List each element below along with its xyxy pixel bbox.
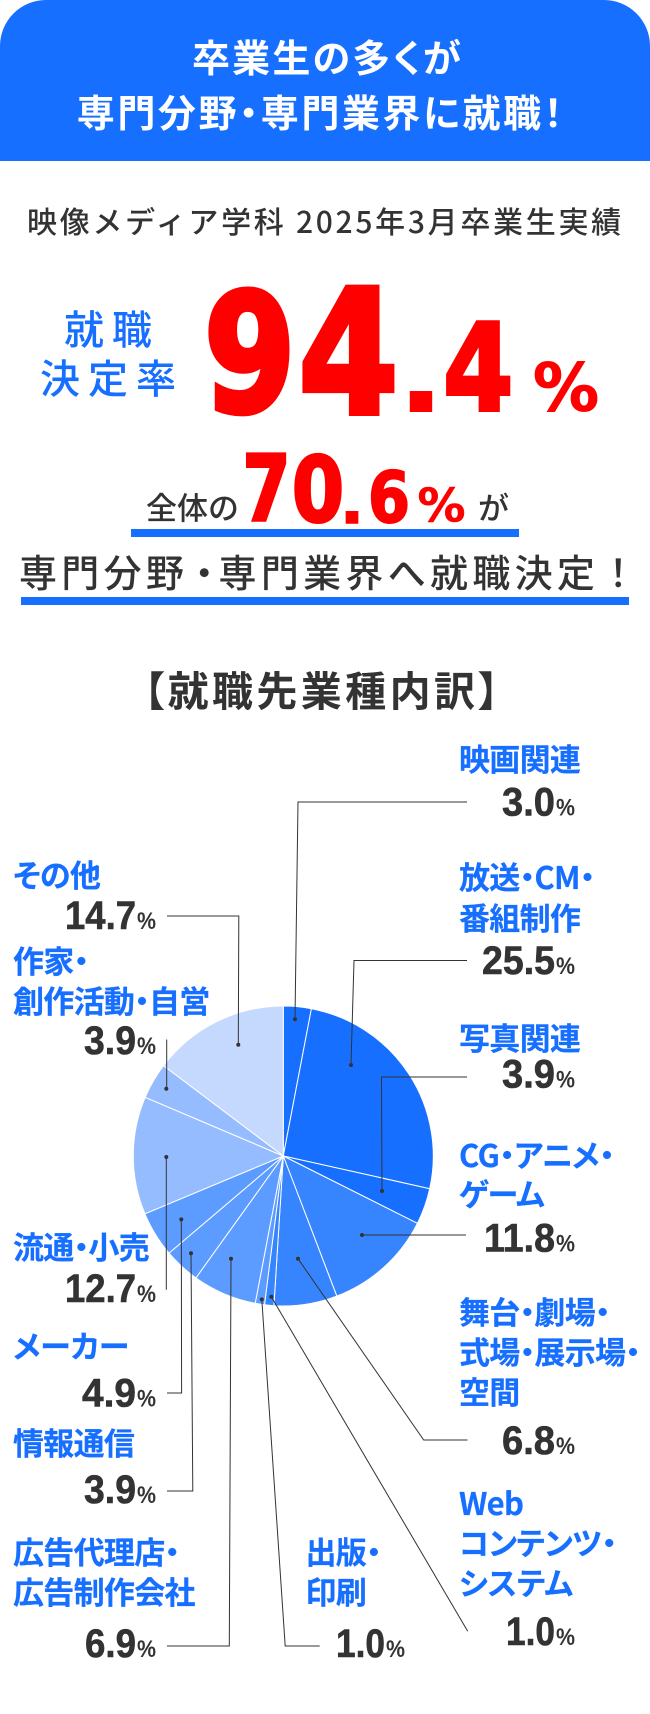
label: broadcast: 25.5 bbox=[482, 939, 555, 983]
label: other: 14.7 bbox=[65, 894, 136, 938]
label: maker: メーカー bbox=[13, 1322, 129, 1367]
label: publishing: % bbox=[386, 1636, 405, 1663]
label: CG: CG・アニメ・ bbox=[459, 1131, 614, 1176]
header heading: 専門分野・専門業界に就職！ bbox=[77, 83, 565, 138]
70.6% headline bbox=[146, 438, 509, 543]
label: IT: 3.9 bbox=[84, 1468, 136, 1512]
underline bar bbox=[21, 597, 629, 605]
header banner bbox=[0, 0, 650, 161]
label: broadcast: 番組制作 bbox=[459, 894, 581, 939]
label: advertising bbox=[13, 1528, 195, 1666]
label: freelance: 3.9 bbox=[84, 1019, 136, 1063]
label: advertising: 6.9 bbox=[85, 1622, 136, 1666]
label: photo bbox=[459, 1014, 581, 1096]
label: photo: 写真関連 bbox=[459, 1014, 581, 1059]
70.6% headline: . bbox=[340, 468, 364, 538]
label: publishing: 1.0 bbox=[336, 1622, 385, 1666]
70.6% headline: が bbox=[478, 484, 509, 528]
label: publishing: 出版・ bbox=[306, 1528, 381, 1573]
employment rate 94.4%: . bbox=[400, 324, 442, 434]
label: stage: 舞台・劇場・ bbox=[459, 1288, 610, 1333]
70.6% headline: 0 bbox=[292, 438, 344, 543]
label: retail: % bbox=[137, 1281, 156, 1308]
employment rate 94.4%: 4 bbox=[298, 253, 398, 454]
label: maker bbox=[13, 1322, 156, 1416]
label: stage: 式場・展示場・ bbox=[459, 1328, 640, 1373]
label: maker: 4.9 bbox=[82, 1372, 136, 1416]
label: stage: % bbox=[556, 1433, 575, 1460]
label: broadcast: % bbox=[556, 953, 575, 980]
label: advertising: % bbox=[137, 1636, 156, 1663]
label: maker: % bbox=[137, 1386, 156, 1412]
label: film: 映画関連 bbox=[459, 735, 581, 780]
label: broadcast: 放送・CM・ bbox=[459, 853, 595, 898]
employment rate 94.4% bbox=[204, 253, 599, 454]
chart heading: 【就職先業種内訳】 bbox=[144, 658, 502, 718]
label: freelance: 創作活動・自営 bbox=[13, 977, 210, 1022]
70.6% headline: 全体の bbox=[146, 484, 239, 528]
label: retail bbox=[13, 1223, 156, 1311]
label: web: コンテンツ・ bbox=[459, 1519, 616, 1564]
label: web: % bbox=[556, 1624, 575, 1651]
label: CG: ゲーム bbox=[459, 1170, 545, 1215]
header heading: 卒業生の多くが bbox=[192, 28, 463, 83]
subtitle: 映像メディア学科 2025年3月卒業生実績 bbox=[27, 198, 624, 242]
label: freelance: 作家・ bbox=[13, 937, 88, 982]
pie chart bbox=[133, 1006, 433, 1306]
label: IT: % bbox=[137, 1482, 156, 1509]
label: broadcast bbox=[459, 853, 595, 983]
label: stage: 6.8 bbox=[502, 1419, 555, 1463]
70.6% headline: % bbox=[418, 478, 466, 532]
label: film: % bbox=[556, 794, 575, 822]
label: CG: % bbox=[556, 1230, 575, 1258]
employment rate label: 決定率 bbox=[40, 347, 184, 405]
label: film bbox=[459, 735, 581, 824]
employment rate 94.4%: 4 bbox=[443, 299, 513, 439]
70.6% headline: 6 bbox=[368, 457, 410, 539]
leader dots bbox=[164, 1017, 384, 1301]
label: web: システム bbox=[459, 1559, 573, 1604]
label: stage bbox=[459, 1288, 640, 1463]
label: photo: 3.9 bbox=[502, 1052, 555, 1096]
underline bar bbox=[131, 529, 519, 537]
label: web: Web bbox=[459, 1479, 523, 1524]
label: stage: 空間 bbox=[459, 1368, 520, 1413]
label: retail: 流通・小売 bbox=[13, 1223, 149, 1268]
label: publishing: 印刷 bbox=[306, 1568, 366, 1613]
leader lines bbox=[166, 802, 468, 1646]
label: IT: 情報通信 bbox=[13, 1419, 135, 1464]
label: other: % bbox=[137, 908, 156, 935]
label: IT bbox=[13, 1419, 156, 1512]
label: web: 1.0 bbox=[506, 1610, 555, 1654]
label: CG: 11.8 bbox=[484, 1216, 555, 1260]
label: publishing bbox=[306, 1528, 405, 1666]
employment rate 94.4%: 9 bbox=[204, 259, 296, 450]
label: other: その他 bbox=[13, 851, 101, 896]
label: film: 3.0 bbox=[502, 780, 555, 824]
label: other bbox=[13, 851, 156, 938]
label: freelance: % bbox=[137, 1033, 156, 1060]
employment rate label: 就職 bbox=[64, 298, 160, 356]
label: freelance bbox=[13, 937, 210, 1063]
label: advertising: 広告制作会社 bbox=[13, 1568, 195, 1613]
label: web bbox=[459, 1479, 616, 1654]
label: advertising: 広告代理店・ bbox=[13, 1528, 179, 1573]
70.6% headline: 7 bbox=[242, 438, 290, 542]
label: retail: 12.7 bbox=[65, 1267, 136, 1311]
employment rate 94.4%: % bbox=[533, 350, 599, 426]
header heading bbox=[77, 28, 565, 138]
label: photo: % bbox=[556, 1066, 575, 1094]
employment rate label bbox=[40, 298, 184, 405]
label: CG bbox=[459, 1131, 614, 1260]
specialised field statement: 専門分野・専門業界へ就職決定！ bbox=[19, 543, 642, 598]
